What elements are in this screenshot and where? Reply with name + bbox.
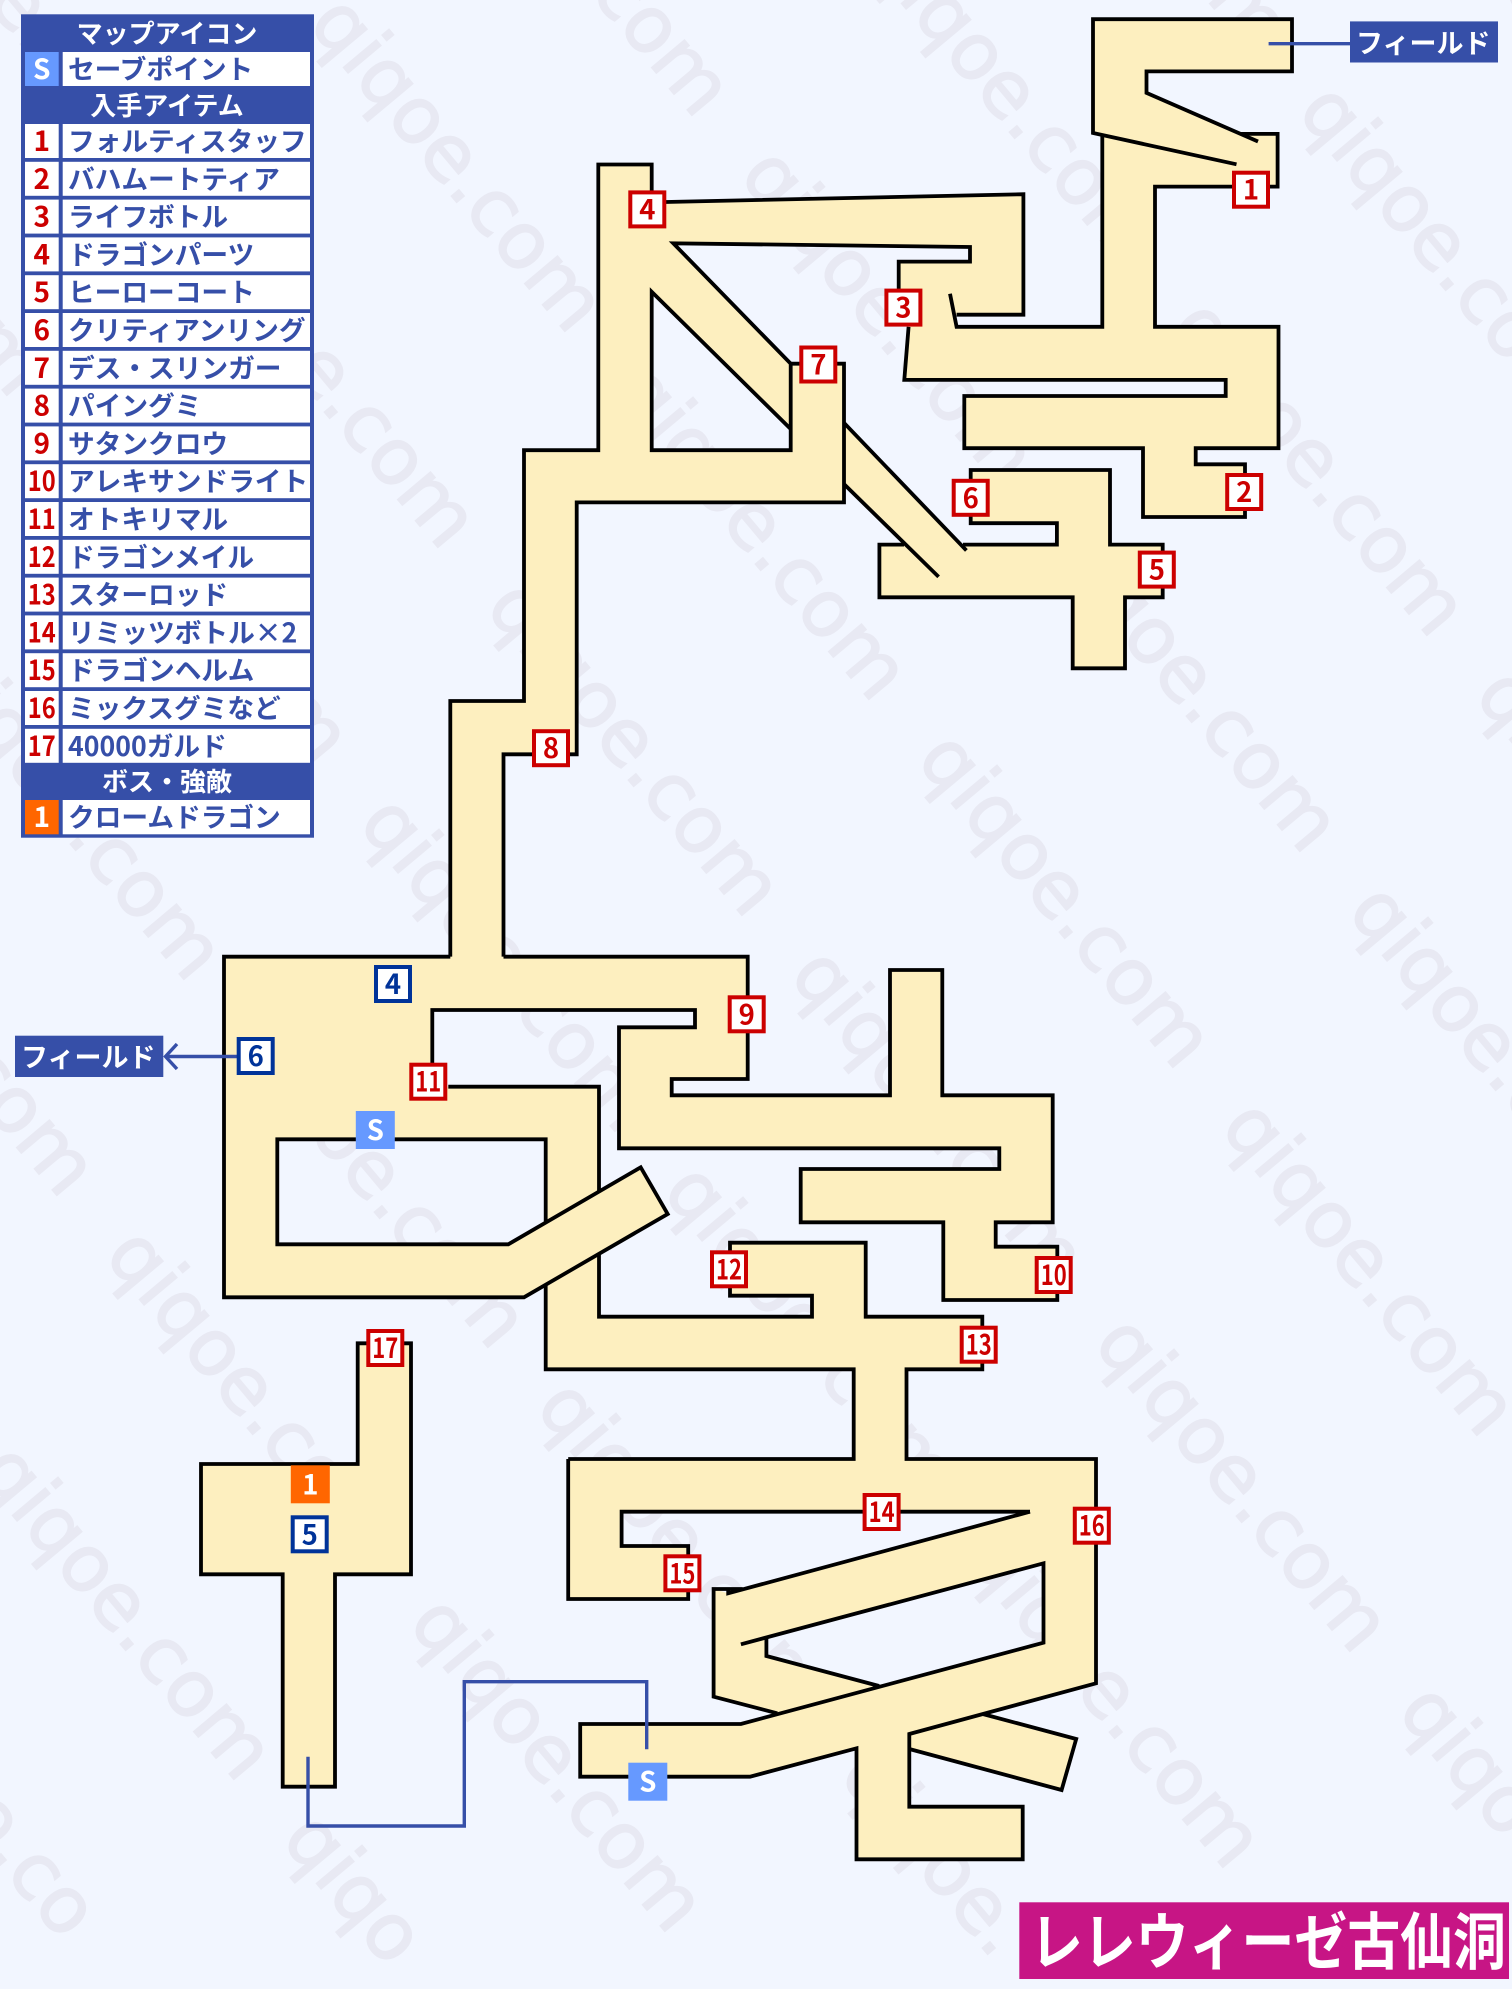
- marker: connection 5: [293, 1512, 327, 1552]
- arrow: map exit 6 to field: [166, 1044, 240, 1069]
- legend heading: map icons: マップアイコン: [77, 14, 257, 51]
- marker: item 6: [954, 476, 988, 516]
- legend heading: items: 入手アイテム: [90, 86, 244, 123]
- text: qiqo: [265, 1794, 443, 1981]
- marker: connection 6: 6: [248, 1034, 264, 1074]
- marker: item 7: [801, 342, 835, 382]
- text: qiqoe.com: [723, 130, 1055, 501]
- marker: save point lower: S: [639, 1760, 656, 1800]
- legend row 7: 7: [34, 347, 50, 387]
- legend row 13: スターロッド: [68, 574, 228, 613]
- marker: item 17: 17: [372, 1326, 398, 1366]
- text: qiqoe.com: [1077, 1298, 1409, 1669]
- marker: item 14: 14: [869, 1490, 895, 1530]
- legend row 15: ドラゴンヘルム: [68, 649, 254, 688]
- legend row 14: 14: [28, 611, 56, 651]
- text: qiqoe.com: [88, 1210, 420, 1581]
- dungeon map: upper section corridors: [450, 19, 1292, 960]
- legend row 3: ライフボトル: [68, 196, 228, 235]
- legend row 16: ミックスグミなど: [68, 687, 281, 726]
- legend row 3: [25, 196, 310, 236]
- legend heading: boss: ボス・強敵: [102, 762, 232, 799]
- marker: item 13: 13: [966, 1323, 992, 1363]
- text: qiqoe.com: [1154, 282, 1486, 653]
- marker: item 12: 12: [716, 1247, 742, 1287]
- marker: save point lower: [628, 1760, 667, 1801]
- legend row 15: 15: [28, 649, 56, 689]
- marker: connection 4: [376, 962, 410, 1002]
- marker: boss 1: [291, 1462, 330, 1503]
- legend row 4: 4: [34, 233, 50, 273]
- legend row 12: [25, 536, 310, 576]
- marker: item 7: 7: [810, 342, 826, 382]
- text: qiqoe.com: [215, 994, 547, 1365]
- legend row 15: [25, 649, 310, 689]
- legend row 1: フォルティスタッフ: [68, 120, 307, 159]
- marker: item 9: 9: [739, 992, 755, 1032]
- marker: item 15: 15: [669, 1551, 695, 1591]
- legend row 17: 40000ガルド: [68, 725, 227, 764]
- legend row 12: ドラゴンメイル: [68, 536, 254, 575]
- marker: connection 6: [239, 1034, 273, 1074]
- marker: item 2: [1227, 470, 1261, 510]
- text: qiqoe.: [823, 1730, 1047, 1973]
- legend row 8: 8: [34, 385, 50, 425]
- marker: item 3: [886, 286, 920, 326]
- legend row 5: [25, 271, 310, 311]
- marker: item 8: [534, 726, 568, 766]
- text: qiqoe.com: [773, 930, 1105, 1301]
- legend row 10: アレキサンドライト: [68, 460, 308, 499]
- text: qiqoe.com: [646, 1146, 978, 1517]
- legend row: save point: [25, 48, 310, 88]
- legend row 14: リミッツボトル×2: [68, 611, 297, 650]
- legend row: boss 1: 1: [34, 796, 50, 836]
- legend row 12: 12: [28, 536, 56, 576]
- connector: warp line between lower areas: [308, 1682, 647, 1826]
- legend row 11: [25, 498, 310, 538]
- marker: save point upper: [356, 1108, 395, 1149]
- legend row 13: 13: [28, 574, 56, 614]
- text: qiqoe.com: [596, 346, 928, 717]
- text: qiqoe.com: [1027, 498, 1359, 869]
- legend row 11: オトキリマル: [68, 498, 228, 537]
- marker: item 1: 1: [1243, 168, 1259, 208]
- legend row 17: 17: [28, 725, 56, 765]
- legend row 8: [25, 385, 310, 425]
- dungeon map: middle section corridors: [224, 957, 1057, 1369]
- legend row 1: 1: [34, 120, 50, 160]
- legend row 10: 10: [28, 460, 56, 500]
- legend row 8: パイングミ: [68, 385, 201, 424]
- text: qiqoe.com: [950, 1514, 1282, 1885]
- legend row 3: 3: [34, 196, 50, 236]
- legend row: boss 1: クロームドラゴン: [68, 796, 281, 835]
- dungeon map: lower left section corridors: [201, 1343, 411, 1787]
- marker: item 4: 4: [639, 187, 655, 227]
- text: qiqoe.com: [900, 714, 1232, 1085]
- marker: item 5: [1140, 548, 1174, 588]
- text: qiqoe.com: [519, 1362, 851, 1733]
- legend row 2: 2: [34, 158, 50, 198]
- marker: item 6: 6: [963, 476, 979, 516]
- dungeon map: lower right section corridors: [546, 1243, 1096, 1859]
- legend row 4: ドラゴンパーツ: [68, 233, 254, 272]
- legend row 4: [25, 233, 310, 273]
- legend row 16: 16: [28, 687, 56, 727]
- marker: item 1: [1234, 168, 1268, 208]
- text: qiqoe.com: [392, 1578, 724, 1949]
- legend row 9: 9: [34, 422, 50, 462]
- legend row 9: サタンクロウ: [68, 422, 228, 461]
- panel: legend: [21, 14, 314, 838]
- marker: item 16: 16: [1079, 1504, 1105, 1544]
- marker: item 5: 5: [1149, 548, 1165, 588]
- legend row 17: [25, 725, 310, 765]
- text: qiqoe.com: [38, 410, 370, 781]
- marker: connection 5: 5: [302, 1512, 318, 1552]
- text: qiqoe.com: [342, 778, 674, 1149]
- marker: connection 4: 4: [385, 962, 401, 1002]
- legend row 2: バハムートティア: [68, 158, 280, 197]
- marker: item 9: [730, 992, 764, 1032]
- legend row 13: [25, 574, 310, 614]
- legend row: save point: S: [33, 48, 51, 88]
- marker: item 2: 2: [1236, 470, 1252, 510]
- marker: item 8: 8: [543, 726, 559, 766]
- legend row 7: デス・スリンガー: [68, 347, 282, 386]
- legend row 6: 6: [34, 309, 50, 349]
- marker: item 4: [630, 187, 664, 227]
- marker: save point upper: S: [367, 1108, 384, 1148]
- connector: line to field exit (top right): [1269, 42, 1350, 45]
- text: qiqoe.com: [165, 194, 497, 565]
- legend row 5: 5: [34, 271, 50, 311]
- marker: item 3: 3: [895, 286, 912, 326]
- legend row 5: ヒーローコート: [68, 271, 255, 310]
- legend row 11: 11: [28, 498, 56, 538]
- legend row 9: [25, 422, 310, 462]
- text: qiqoe.com: [469, 562, 801, 933]
- legend row 6: クリティアンリング: [68, 309, 306, 348]
- text: q: [1254, 1882, 1355, 1978]
- marker: item 10: 10: [1041, 1253, 1067, 1293]
- marker: boss 1: 1: [302, 1462, 318, 1502]
- label: field exit top right: フィールド: [1356, 22, 1490, 61]
- marker: item 11: 11: [415, 1060, 441, 1100]
- legend row: save point: セーブポイント: [68, 48, 253, 87]
- label: field exit left: フィールド: [21, 1036, 155, 1075]
